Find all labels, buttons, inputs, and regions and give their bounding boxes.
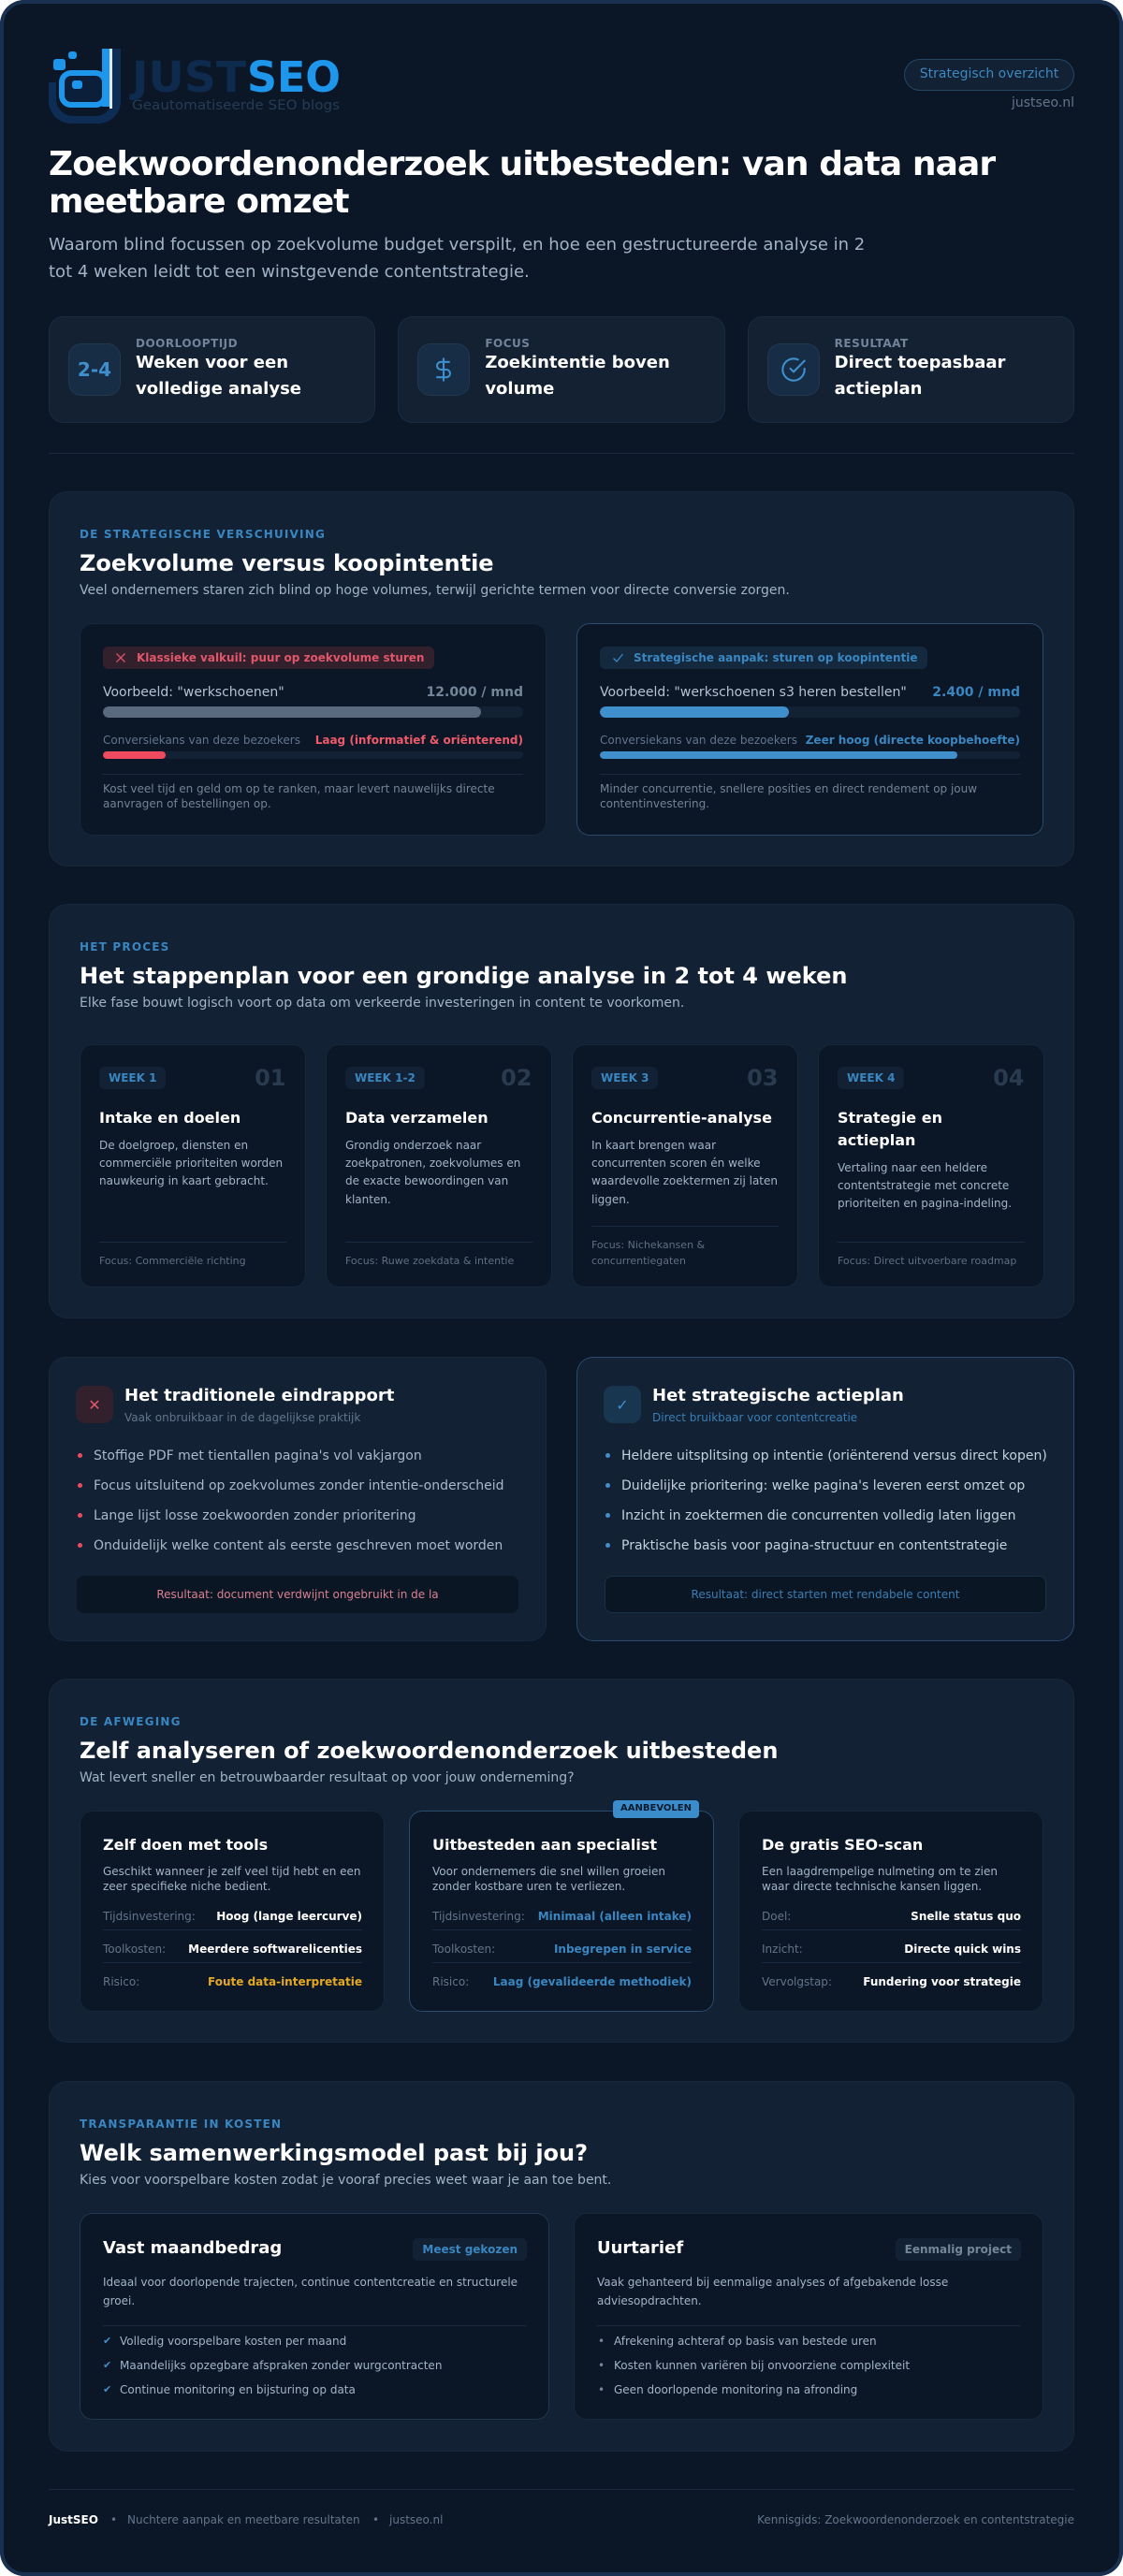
- icon: check: [604, 1386, 641, 1423]
- week badge: [345, 1067, 425, 1089]
- subtitle: [49, 235, 865, 282]
- eyebrow: DE STRATEGISCHE VERSCHUIVING: [80, 528, 326, 541]
- model text: Vaak gehanteerd bij eenmalige analyses of afgebakende losse: [597, 2276, 948, 2289]
- model text: [597, 2276, 948, 2307]
- icon: cross: [76, 1386, 113, 1423]
- heading: Zelf analyseren of zoekwoordenonderzoek uitbesteden: [80, 1738, 778, 1764]
- option: zelf doen: [80, 1811, 385, 2012]
- step number: 02: [501, 1065, 532, 1091]
- step text: [345, 1139, 520, 1206]
- step focus: Focus: Nichekansen &: [591, 1239, 705, 1251]
- result box: [605, 1576, 1046, 1613]
- option text: Voor ondernemers die snel willen groeien: [432, 1865, 665, 1878]
- conversion bar: [600, 751, 1020, 759]
- row: doel: [762, 1910, 1021, 1923]
- step title: Intake en doelen: [99, 1109, 241, 1127]
- icon: cross: ✕: [88, 1396, 101, 1413]
- week badge: WEEK 1: [109, 1071, 156, 1084]
- step title: Data verzamelen: [345, 1109, 489, 1127]
- conversion row: [103, 734, 523, 747]
- footer: •: [110, 2513, 117, 2526]
- card: klassieke valkuil: [80, 623, 547, 836]
- stat text: [835, 353, 1005, 399]
- row: tijd: Tijdsinvestering:: [432, 1910, 525, 1923]
- bullet list: Lange lijst losse zoekwoorden zonder prioritering: [94, 1508, 416, 1523]
- model: uurtarief: [574, 2213, 1043, 2420]
- row: tijd: Hoog (lange leercurve): [216, 1910, 362, 1923]
- row: tijd: [432, 1910, 692, 1923]
- volume row: 12.000 / mnd: [427, 685, 523, 700]
- model list: [598, 2335, 910, 2396]
- badge: aanpak: [600, 647, 927, 669]
- step text: de exacte bewoordingen van: [345, 1174, 508, 1187]
- bullet list: Duidelijke prioritering: welke pagina's leveren eerst omzet op: [621, 1478, 1025, 1493]
- heading: Zoekvolume versus koopintentie: [80, 550, 494, 576]
- model text: [103, 2276, 518, 2307]
- step text: prioriteiten en pagina-indeling.: [838, 1197, 1012, 1210]
- model text: Ideaal voor doorlopende trajecten, continue contentcreatie en structurele: [103, 2276, 518, 2289]
- step text: [99, 1139, 283, 1187]
- bullet list: Stoffige PDF met tientallen pagina's vol vakjargon: [94, 1448, 422, 1463]
- row: kosten: [103, 1943, 362, 1956]
- step text: zoekpatronen, zoekvolumes en: [345, 1157, 520, 1170]
- week badge: WEEK 3: [601, 1071, 649, 1084]
- step title: Concurrentie-analyse: [591, 1109, 772, 1127]
- description: Wat levert sneller en betrouwbaarder resultaat op voor jouw onderneming?: [80, 1770, 575, 1785]
- row: risico: Risico:: [432, 1975, 469, 1988]
- bullet list: Onduidelijk welke content als eerste geschreven moet worden: [94, 1538, 503, 1553]
- icon: 2-4: 2-4: [78, 358, 111, 381]
- conversion row: [600, 734, 1020, 747]
- step title: [838, 1109, 942, 1149]
- card: strategische aanpak: [576, 623, 1043, 836]
- description: Elke fase bouwt logisch voort op data om verkeerde investeringen in content te voorkomen.: [80, 996, 684, 1011]
- step 4: [818, 1044, 1044, 1288]
- option: gratis scan: [738, 1811, 1043, 2012]
- conversion bar: [103, 751, 523, 759]
- badge: valkuil: [103, 647, 434, 669]
- step number: 04: [993, 1065, 1024, 1091]
- option text: Geschikt wanneer je zelf veel tijd hebt en een: [103, 1865, 361, 1878]
- row: risico: Foute data-interpretatie: [208, 1975, 362, 1988]
- description: Kies voor voorspelbare kosten zodat je vooraf precies weet waar je aan toe bent.: [80, 2173, 611, 2188]
- panel title: Het traditionele eindrapport: [124, 1386, 394, 1405]
- panel subtitle: Direct bruikbaar voor contentcreatie: [652, 1411, 857, 1424]
- bullet list: [78, 1448, 504, 1553]
- stat text: [136, 353, 301, 399]
- note: Kost veel tijd en geld om op te ranken, maar levert nauwelijks directe: [103, 782, 495, 795]
- row: kosten: Meerdere softwarelicenties: [188, 1943, 362, 1956]
- model list: ✔: [103, 2359, 111, 2371]
- subtitle: tot 4 weken leidt tot een winstgevende contentstrategie.: [49, 262, 530, 282]
- week badge: [838, 1067, 904, 1089]
- option text: zonder kostbare uren te verliezen.: [432, 1880, 625, 1893]
- bullet list: Inzicht in zoektermen die concurrenten volledig laten liggen: [621, 1508, 1016, 1523]
- volume row: [103, 685, 523, 700]
- stat text: Weken voor een: [136, 353, 288, 372]
- model list: Geen doorlopende monitoring na afronding: [614, 2383, 857, 2396]
- row: risico: Laag (gevalideerde methodiek): [493, 1975, 692, 1988]
- model list: Maandelijks opzegbare afspraken zonder wurgcontracten: [120, 2359, 442, 2372]
- step focus: Focus: Direct uitvoerbare roadmap: [838, 1255, 1016, 1267]
- row: kosten: Toolkosten:: [103, 1943, 166, 1956]
- volume row: Voorbeeld: "werkschoenen s3 heren bestellen": [600, 685, 907, 700]
- model list: [103, 2335, 442, 2396]
- panel: samenwerkingsmodel: [49, 2081, 1074, 2452]
- model list: ✔: [103, 2383, 111, 2395]
- row: doel: Snelle status quo: [911, 1910, 1021, 1923]
- description: Veel ondernemers staren zich blind op hoge volumes, terwijl gerichte termen voor directe conversie zorgen.: [80, 583, 790, 598]
- bullet list: [605, 1448, 1047, 1553]
- site url: justseo.nl: [1012, 95, 1074, 110]
- volume row: 2.400 / mnd: [932, 685, 1020, 700]
- step text: De doelgroep, diensten en: [99, 1139, 248, 1152]
- badge: aanbevolen: AANBEVOLEN: [620, 1803, 692, 1813]
- eyebrow: TRANSPARANTIE IN KOSTEN: [80, 2118, 282, 2131]
- row: vervolgstap: Fundering voor strategie: [863, 1975, 1021, 1988]
- title: [49, 145, 996, 221]
- footer: [48, 2513, 1074, 2526]
- model tag: Eenmalig project: [905, 2243, 1012, 2256]
- week badge: WEEK 1-2: [355, 1071, 416, 1084]
- row: risico: [103, 1975, 362, 1988]
- step text: commerciële prioriteiten worden: [99, 1157, 283, 1170]
- week badge: [591, 1067, 658, 1089]
- option text: [103, 1865, 361, 1893]
- row: risico: Risico:: [103, 1975, 139, 1988]
- panel: het traditionele eindrapport: [49, 1357, 547, 1641]
- step title: Strategie en: [838, 1109, 942, 1127]
- result box: Resultaat: document verdwijnt ongebruikt in de la: [156, 1588, 439, 1601]
- model list: •: [598, 2335, 605, 2348]
- step text: contentstrategie met concrete: [838, 1179, 1009, 1192]
- row: tijd: [103, 1910, 362, 1923]
- logo: JustSEO: JUST: [129, 52, 246, 102]
- option text: zeer specifieke niche bedient.: [103, 1880, 270, 1893]
- stat card: focus: [398, 316, 725, 423]
- bullet list: Praktische basis voor pagina-structuur en contentstrategie: [621, 1538, 1007, 1553]
- conversion row: Zeer hoog (directe koopbehoefte): [806, 734, 1020, 747]
- pill: strategisch overzicht: [904, 59, 1074, 91]
- step focus: concurrentiegaten: [591, 1255, 686, 1267]
- badge: valkuil: Klassieke valkuil: puur op zoekvolume sturen: [137, 651, 424, 664]
- model tag: [896, 2238, 1021, 2261]
- icon: 2-4: [68, 343, 121, 396]
- note: contentinvestering.: [600, 797, 709, 810]
- panel: de afweging: [49, 1679, 1074, 2043]
- stat text: Direct toepasbaar: [835, 353, 1005, 372]
- title: meetbare omzet: [49, 182, 349, 221]
- step 2: [326, 1044, 552, 1288]
- step title: actieplan: [838, 1131, 915, 1149]
- step focus: [591, 1239, 705, 1267]
- step text: [838, 1161, 1012, 1210]
- row: kosten: Toolkosten:: [432, 1943, 495, 1956]
- row: doel: Doel:: [762, 1910, 791, 1923]
- eyebrow: HET PROCES: [80, 940, 170, 953]
- panel: het strategische actieplan: [576, 1357, 1074, 1641]
- step text: concurrenten scoren én welke: [591, 1157, 761, 1170]
- step text: Grondig onderzoek naar: [345, 1139, 481, 1152]
- step 1: [80, 1044, 305, 1288]
- step text: In kaart brengen waar: [591, 1139, 716, 1152]
- note: [600, 782, 977, 810]
- bullet list: Heldere uitsplitsing op intentie (oriënterend versus direct kopen): [621, 1448, 1047, 1463]
- row: inzicht: [762, 1943, 1021, 1956]
- note: [103, 782, 495, 810]
- pill: strategisch overzicht: Strategisch overzicht: [920, 66, 1058, 81]
- badge: aanpak: Strategische aanpak: sturen op koopintentie: [634, 651, 917, 664]
- option text: Een laagdrempelige nulmeting om te zien: [762, 1865, 998, 1878]
- row: inzicht: Directe quick wins: [904, 1943, 1021, 1956]
- logo: JustSEO: SEO: [247, 52, 341, 102]
- model tag: Meest gekozen: [422, 2243, 518, 2256]
- option text: [432, 1865, 665, 1893]
- model title: Vast maandbedrag: [103, 2238, 282, 2258]
- model list: Kosten kunnen variëren bij onvoorziene complexiteit: [614, 2359, 910, 2372]
- step text: waardevolle zoektermen zij laten: [591, 1174, 778, 1187]
- stat text: actieplan: [835, 379, 922, 399]
- eyebrow: DE AFWEGING: [80, 1715, 182, 1728]
- logo: JustSEO: [49, 49, 341, 124]
- conversion row: Conversiekans van deze bezoekers: [600, 734, 797, 747]
- bullet list: Focus uitsluitend op zoekvolumes zonder intentie-onderscheid: [94, 1478, 504, 1493]
- volume row: Voorbeeld: "werkschoenen": [103, 685, 284, 700]
- row: kosten: Inbegrepen in service: [554, 1943, 692, 1956]
- step text: klanten.: [345, 1193, 391, 1206]
- model list: Volledig voorspelbare kosten per maand: [120, 2335, 346, 2348]
- row: tijd: Minimaal (alleen intake): [538, 1910, 692, 1923]
- label: RESULTAAT: [835, 337, 909, 350]
- row: vervolgstap: [762, 1975, 1021, 1988]
- conversion row: Laag (informatief & oriënterend): [315, 734, 523, 747]
- step text: [591, 1139, 778, 1206]
- step focus: Focus: Commerciële richting: [99, 1255, 246, 1267]
- model list: Continue monitoring en bijsturing op data: [120, 2383, 356, 2396]
- title: Zoekwoordenonderzoek uitbesteden: van data naar: [49, 145, 995, 183]
- model: vast maandbedrag: [80, 2213, 549, 2420]
- icon: check: ✓: [616, 1396, 629, 1413]
- model list: ✔: [103, 2335, 111, 2347]
- option: uitbesteden: [409, 1811, 714, 2012]
- footer note: Kennisgids: Zoekwoordenonderzoek en contentstrategie: [757, 2513, 1074, 2526]
- option title: De gratis SEO-scan: [762, 1836, 923, 1854]
- stat card: doorlooptijd: [49, 316, 375, 423]
- panel title: Het strategische actieplan: [652, 1386, 904, 1405]
- model text: groei.: [103, 2294, 135, 2307]
- subtitle: Waarom blind focussen op zoekvolume budget verspilt, en hoe een gestructureerde analyse in 2: [49, 235, 865, 255]
- option text: waar directe technische kansen liggen.: [762, 1880, 982, 1893]
- logo: JustSEO: Geautomatiseerde SEO blogs: [132, 98, 340, 113]
- week badge: [99, 1067, 166, 1089]
- label: DOORLOOPTIJD: [136, 337, 238, 350]
- step number: 01: [255, 1065, 286, 1091]
- result box: [77, 1576, 518, 1613]
- row: inzicht: Inzicht:: [762, 1943, 803, 1956]
- label: FOCUS: [485, 337, 530, 350]
- model list: Afrekening achteraf op basis van bestede uren: [614, 2335, 877, 2348]
- heading: Welk samenwerkingsmodel past bij jou?: [80, 2140, 588, 2166]
- panel: zoekvolume versus koopintentie: [49, 491, 1074, 866]
- conversion row: Conversiekans van deze bezoekers: [103, 734, 300, 747]
- option text: [762, 1865, 998, 1893]
- step 3: [572, 1044, 797, 1288]
- step focus: Focus: Ruwe zoekdata & intentie: [345, 1255, 514, 1267]
- badge: aanbevolen: [613, 1800, 699, 1818]
- row: vervolgstap: Vervolgstap:: [762, 1975, 832, 1988]
- model list: •: [598, 2359, 605, 2372]
- step number: 03: [747, 1065, 779, 1091]
- stat text: volledige analyse: [136, 379, 301, 399]
- volume bar: [600, 706, 1020, 718]
- panel: stappenplan: [49, 904, 1074, 1318]
- icon: check circle: [767, 343, 820, 396]
- footer brand: JustSEO: [49, 2513, 98, 2526]
- row: tijd: Tijdsinvestering:: [103, 1910, 196, 1923]
- step text: Vertaling naar een heldere: [838, 1161, 987, 1174]
- stat text: [485, 353, 670, 399]
- footer url: justseo.nl: [389, 2513, 443, 2526]
- panel subtitle: Vaak onbruikbaar in de dagelijkse praktijk: [124, 1411, 360, 1424]
- note: Minder concurrentie, snellere posities en direct rendement op jouw: [600, 782, 977, 795]
- stat text: volume: [485, 379, 554, 399]
- model text: adviesopdrachten.: [597, 2294, 702, 2307]
- stat text: Zoekintentie boven: [485, 353, 670, 372]
- icon: dollar: [417, 343, 470, 396]
- heading: Het stappenplan voor een grondige analyse in 2 tot 4 weken: [80, 963, 848, 989]
- note: aanvragen of bestellingen op.: [103, 797, 271, 810]
- model title: Uurtarief: [597, 2238, 683, 2258]
- row: kosten: [432, 1943, 692, 1956]
- option title: Zelf doen met tools: [103, 1836, 268, 1854]
- step text: nauwkeurig in kaart gebracht.: [99, 1174, 269, 1187]
- stat card: resultaat: [748, 316, 1074, 423]
- model tag: [413, 2238, 527, 2261]
- step text: liggen.: [591, 1193, 630, 1206]
- volume bar: [103, 706, 523, 718]
- footer tagline: Nuchtere aanpak en meetbare resultaten: [127, 2513, 360, 2526]
- model list: •: [598, 2383, 605, 2396]
- option title: Uitbesteden aan specialist: [432, 1836, 657, 1854]
- result box: Resultaat: direct starten met rendabele content: [692, 1588, 959, 1601]
- week badge: WEEK 4: [847, 1071, 895, 1084]
- footer: •: [372, 2513, 379, 2526]
